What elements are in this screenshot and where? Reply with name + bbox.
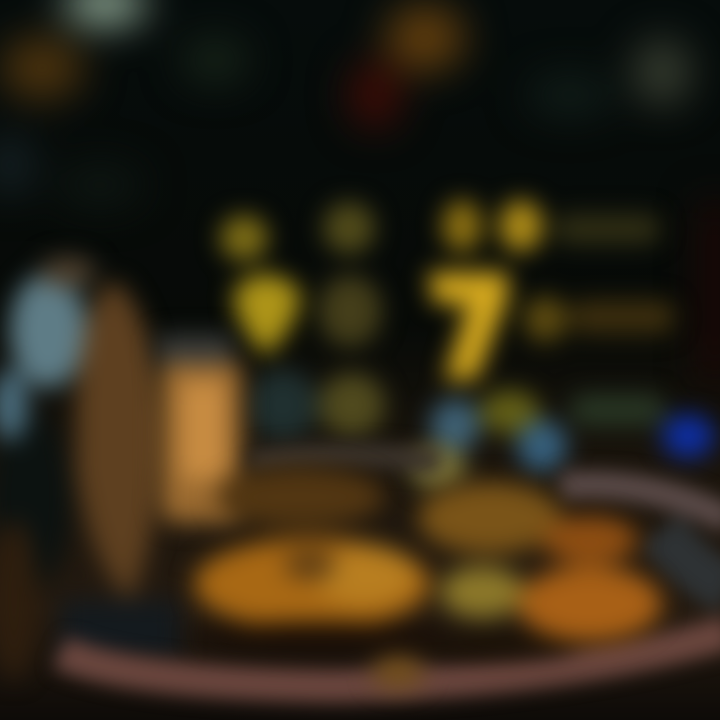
left object: pale shell and brown fin bbox=[0, 256, 180, 680]
digit-like bright glyph bbox=[428, 272, 508, 380]
plated food bbox=[194, 467, 662, 688]
orange jar bbox=[158, 335, 242, 523]
glowing yellow symbols bbox=[220, 200, 714, 490]
top bokeh lights bbox=[0, 0, 720, 380]
plate rim bbox=[60, 455, 720, 686]
